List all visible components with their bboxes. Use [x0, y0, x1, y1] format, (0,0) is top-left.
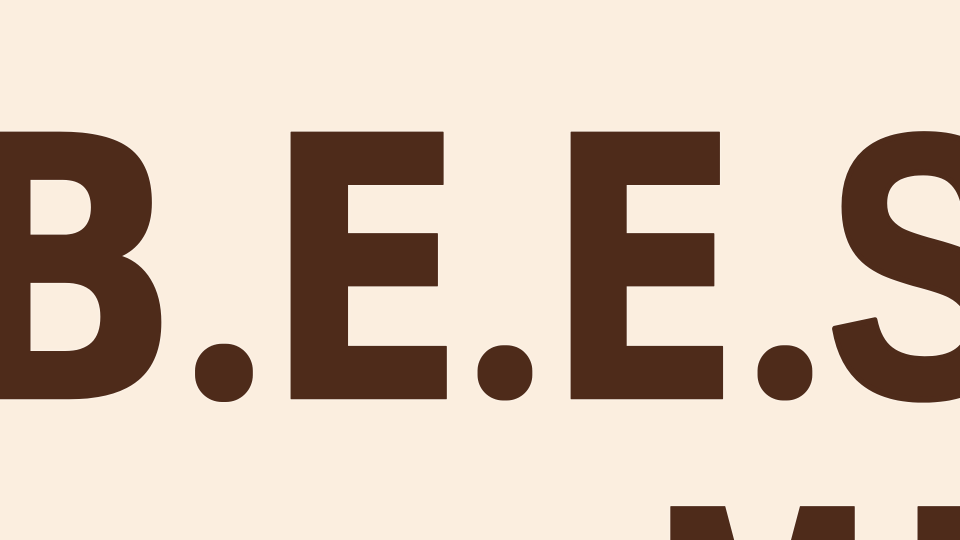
- title: B.E.E.S: E: [264, 59, 468, 485]
- title: B.E.E.S: [0, 58, 960, 485]
- title: B.E.E.S: .: [779, 340, 791, 384]
- title: B.E.E.S: .: [499, 340, 511, 384]
- title: B.E.E.S: E: [544, 59, 744, 485]
- title: B.E.E.S: .: [218, 340, 230, 384]
